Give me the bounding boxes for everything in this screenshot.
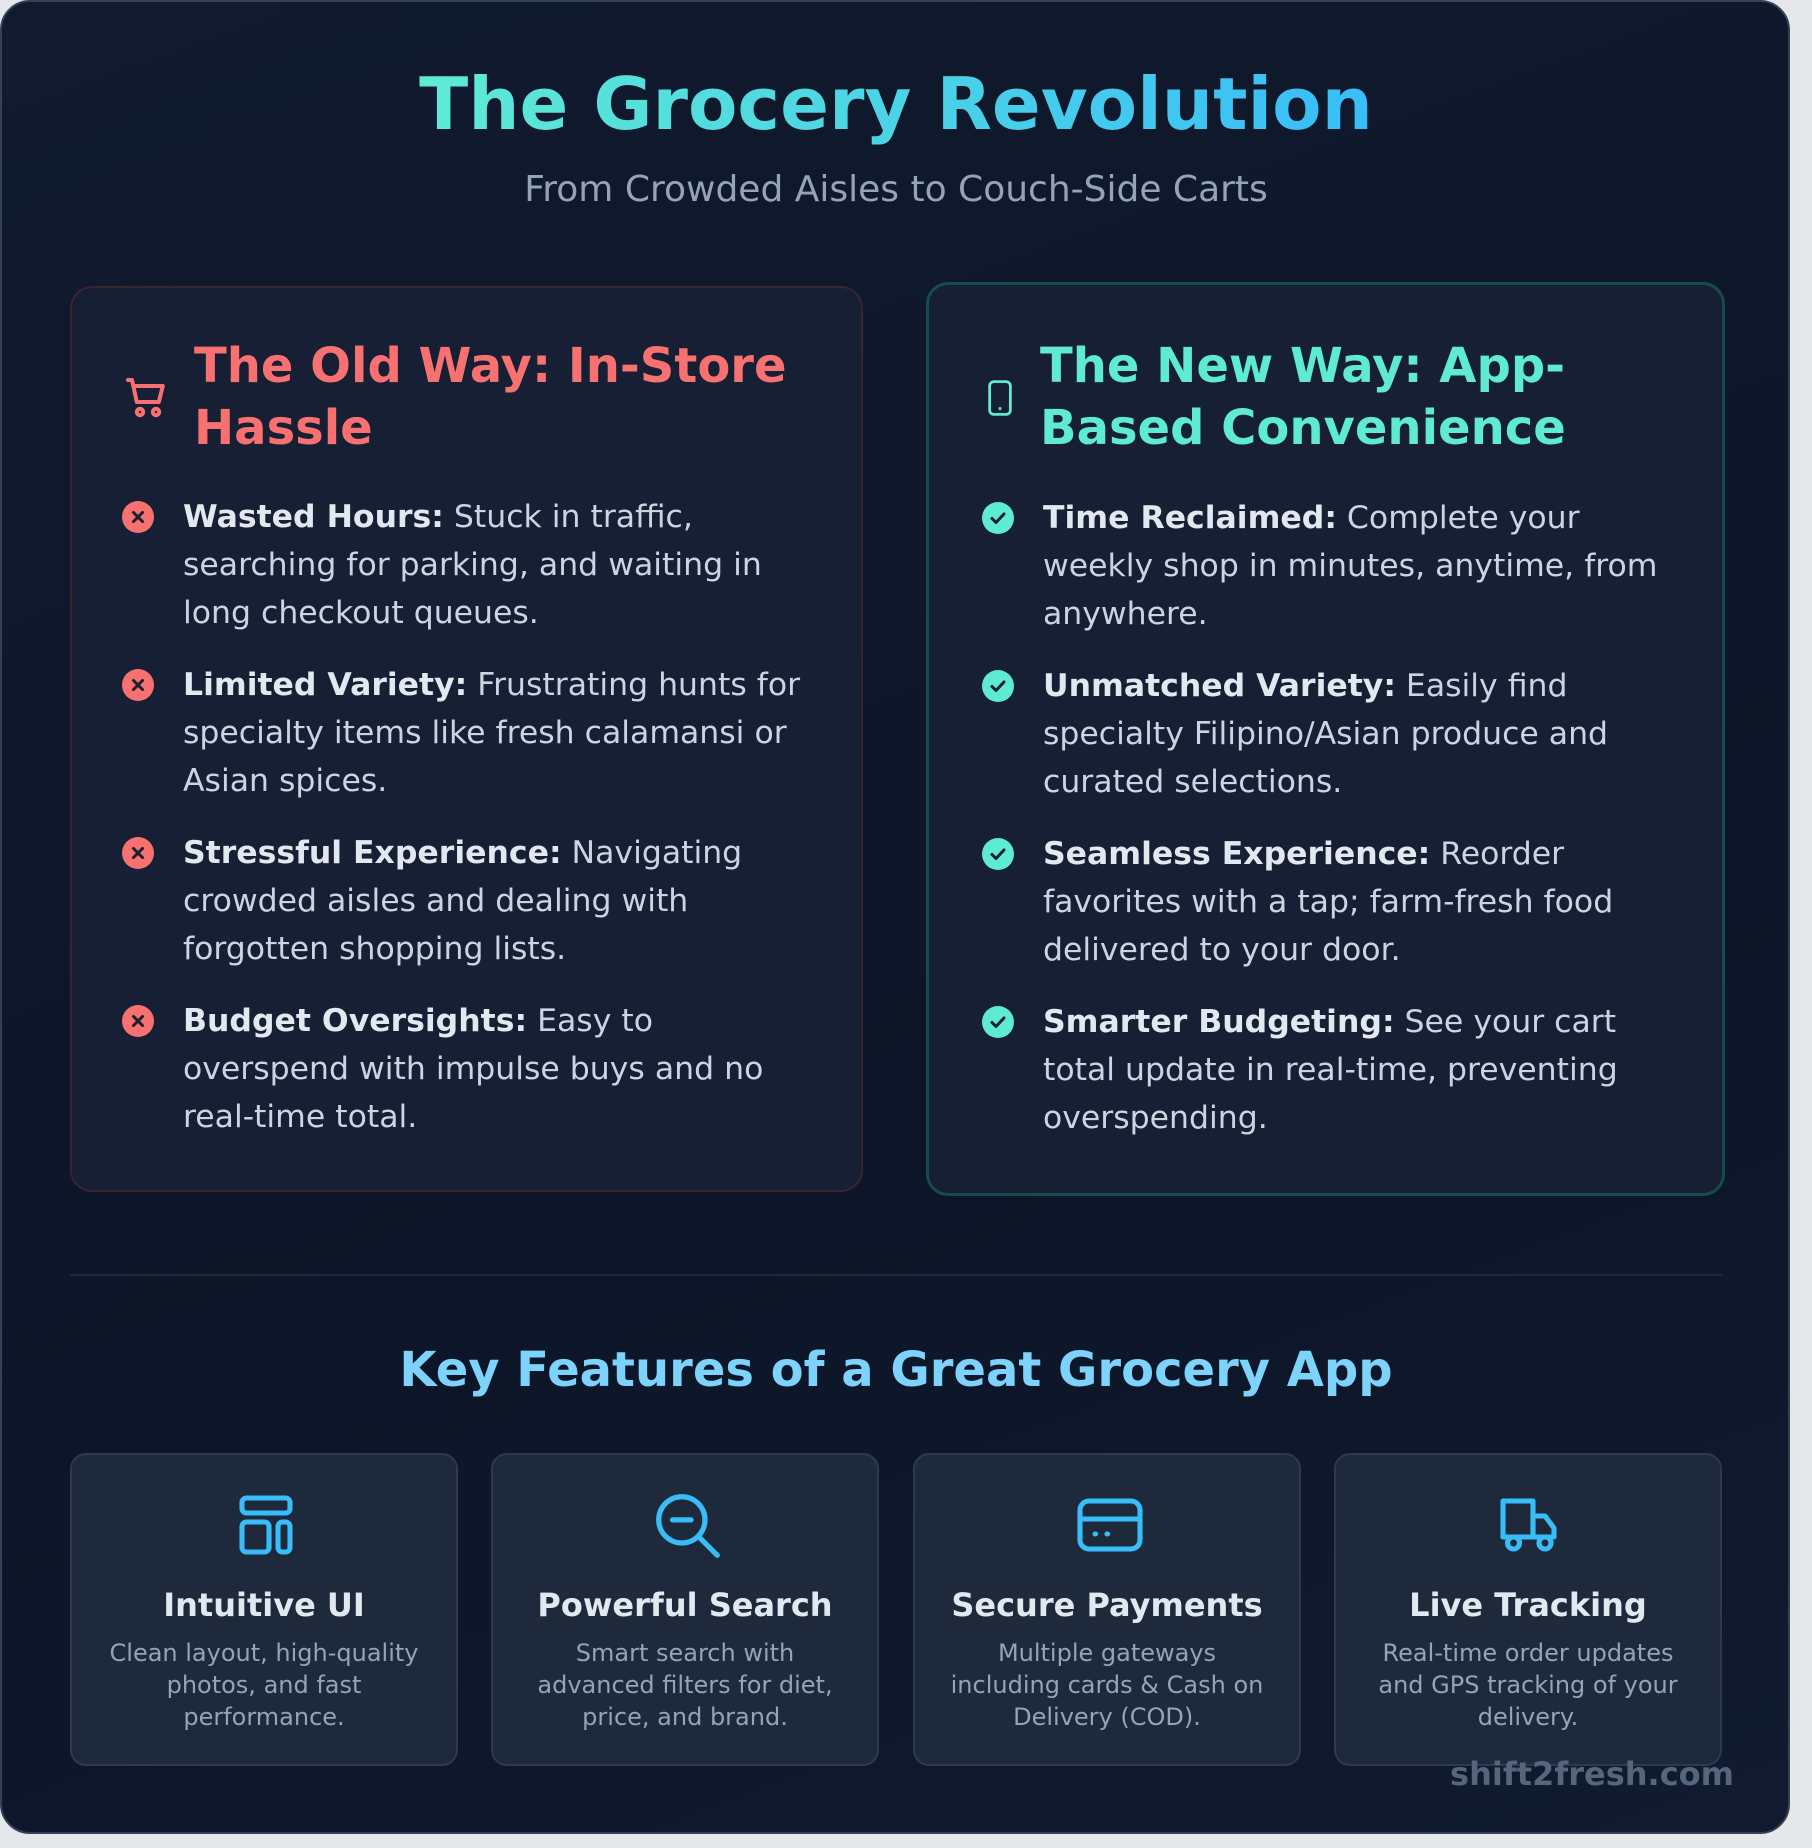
item 4: Smarter Budgeting: See your cart bbox=[1043, 1004, 1616, 1040]
item 3: forgotten shopping lists. bbox=[183, 931, 566, 967]
icon: search bbox=[656, 1494, 720, 1558]
subtitle: From Crowded Aisles to Couch-Side Carts bbox=[524, 169, 1268, 210]
icon: credit card bbox=[1077, 1498, 1143, 1552]
feature card: Secure Payments: including cards & Cash on bbox=[951, 1671, 1263, 1699]
item 4 bbox=[982, 1004, 1618, 1136]
item 2 bbox=[982, 668, 1608, 800]
item 2: Limited Variety: Frustrating hunts for bbox=[183, 667, 800, 703]
feature card: Powerful Search: Powerful Search bbox=[537, 1586, 833, 1624]
item 2: Unmatched Variety: Easily find bbox=[1043, 668, 1568, 704]
item 4: overspending. bbox=[1043, 1100, 1268, 1136]
watermark: shift2fresh.com bbox=[1450, 1755, 1734, 1793]
feature card: Secure Payments: Delivery (COD). bbox=[1013, 1703, 1201, 1731]
feature card: Intuitive UI: Clean layout, high-quality bbox=[110, 1639, 418, 1667]
item 1: anywhere. bbox=[1043, 596, 1208, 632]
feature card: Live Tracking: Live Tracking bbox=[1409, 1586, 1647, 1624]
feature card: Powerful Search bbox=[491, 1453, 879, 1766]
heading: Based Convenience bbox=[1040, 400, 1566, 456]
heading bbox=[1040, 338, 1566, 456]
item 4 bbox=[122, 1003, 763, 1135]
feature card: Powerful Search: price, and brand. bbox=[582, 1703, 788, 1731]
item 2 bbox=[122, 667, 800, 799]
item 2: curated selections. bbox=[1043, 764, 1342, 800]
feature card: Powerful Search: Smart search with bbox=[576, 1639, 794, 1667]
item 1: Time Reclaimed: Complete your bbox=[1043, 500, 1580, 536]
icon: truck bbox=[1500, 1498, 1557, 1552]
item 1: Wasted Hours: Stuck in traffic, bbox=[183, 499, 693, 535]
item 3: crowded aisles and dealing with bbox=[183, 883, 688, 919]
panel: new way bbox=[926, 282, 1725, 1196]
heading: The Old Way: In-Store bbox=[194, 338, 787, 394]
heading: The New Way: App- bbox=[1040, 338, 1565, 394]
item 3: delivered to your door. bbox=[1043, 932, 1401, 968]
feature card: Live Tracking: and GPS tracking of your bbox=[1378, 1671, 1678, 1699]
item 2: specialty Filipino/Asian produce and bbox=[1043, 716, 1608, 752]
feature card: Live Tracking: delivery. bbox=[1478, 1703, 1578, 1731]
title: The Grocery Revolution bbox=[419, 62, 1373, 146]
feature card: Secure Payments: Secure Payments bbox=[951, 1586, 1263, 1624]
panel: old way bbox=[70, 286, 863, 1192]
heading bbox=[194, 338, 787, 456]
feature card: Intuitive UI bbox=[70, 1453, 458, 1766]
feature card: Intuitive UI: Intuitive UI bbox=[163, 1586, 365, 1624]
feature card: Live Tracking: Real-time order updates bbox=[1383, 1639, 1673, 1667]
item 4: overspend with impulse buys and no bbox=[183, 1051, 763, 1087]
item 1: weekly shop in minutes, anytime, from bbox=[1043, 548, 1658, 584]
item 3: Stressful Experience: Navigating bbox=[183, 835, 742, 871]
feature card: Secure Payments: Multiple gateways bbox=[998, 1639, 1216, 1667]
icon: layout bbox=[239, 1496, 293, 1554]
item 2: Asian spices. bbox=[183, 763, 387, 799]
feature card: Intuitive UI: photos, and fast bbox=[167, 1671, 361, 1699]
feature card: Live Tracking bbox=[1334, 1453, 1722, 1766]
item 2: specialty items like fresh calamansi or bbox=[183, 715, 787, 751]
item 3: Seamless Experience: Reorder bbox=[1043, 836, 1564, 872]
item 1: searching for parking, and waiting in bbox=[183, 547, 762, 583]
features heading: Key Features of a Great Grocery App bbox=[399, 1342, 1393, 1398]
item 1 bbox=[982, 500, 1658, 632]
item 1: long checkout queues. bbox=[183, 595, 539, 631]
item 4: total update in real-time, preventing bbox=[1043, 1052, 1618, 1088]
item 3 bbox=[982, 836, 1613, 968]
icon: cart bbox=[126, 378, 165, 418]
feature card: Intuitive UI: performance. bbox=[183, 1703, 345, 1731]
heading: Hassle bbox=[194, 400, 373, 456]
item 3 bbox=[122, 835, 742, 967]
item 3: favorites with a tap; farm-fresh food bbox=[1043, 884, 1613, 920]
feature card: Secure Payments bbox=[913, 1453, 1301, 1766]
item 1 bbox=[122, 499, 762, 631]
item 4: Budget Oversights: Easy to bbox=[183, 1003, 653, 1039]
feature card: Powerful Search: advanced filters for diet, bbox=[537, 1671, 833, 1699]
icon: phone bbox=[988, 380, 1012, 416]
item 4: real-time total. bbox=[183, 1099, 417, 1135]
